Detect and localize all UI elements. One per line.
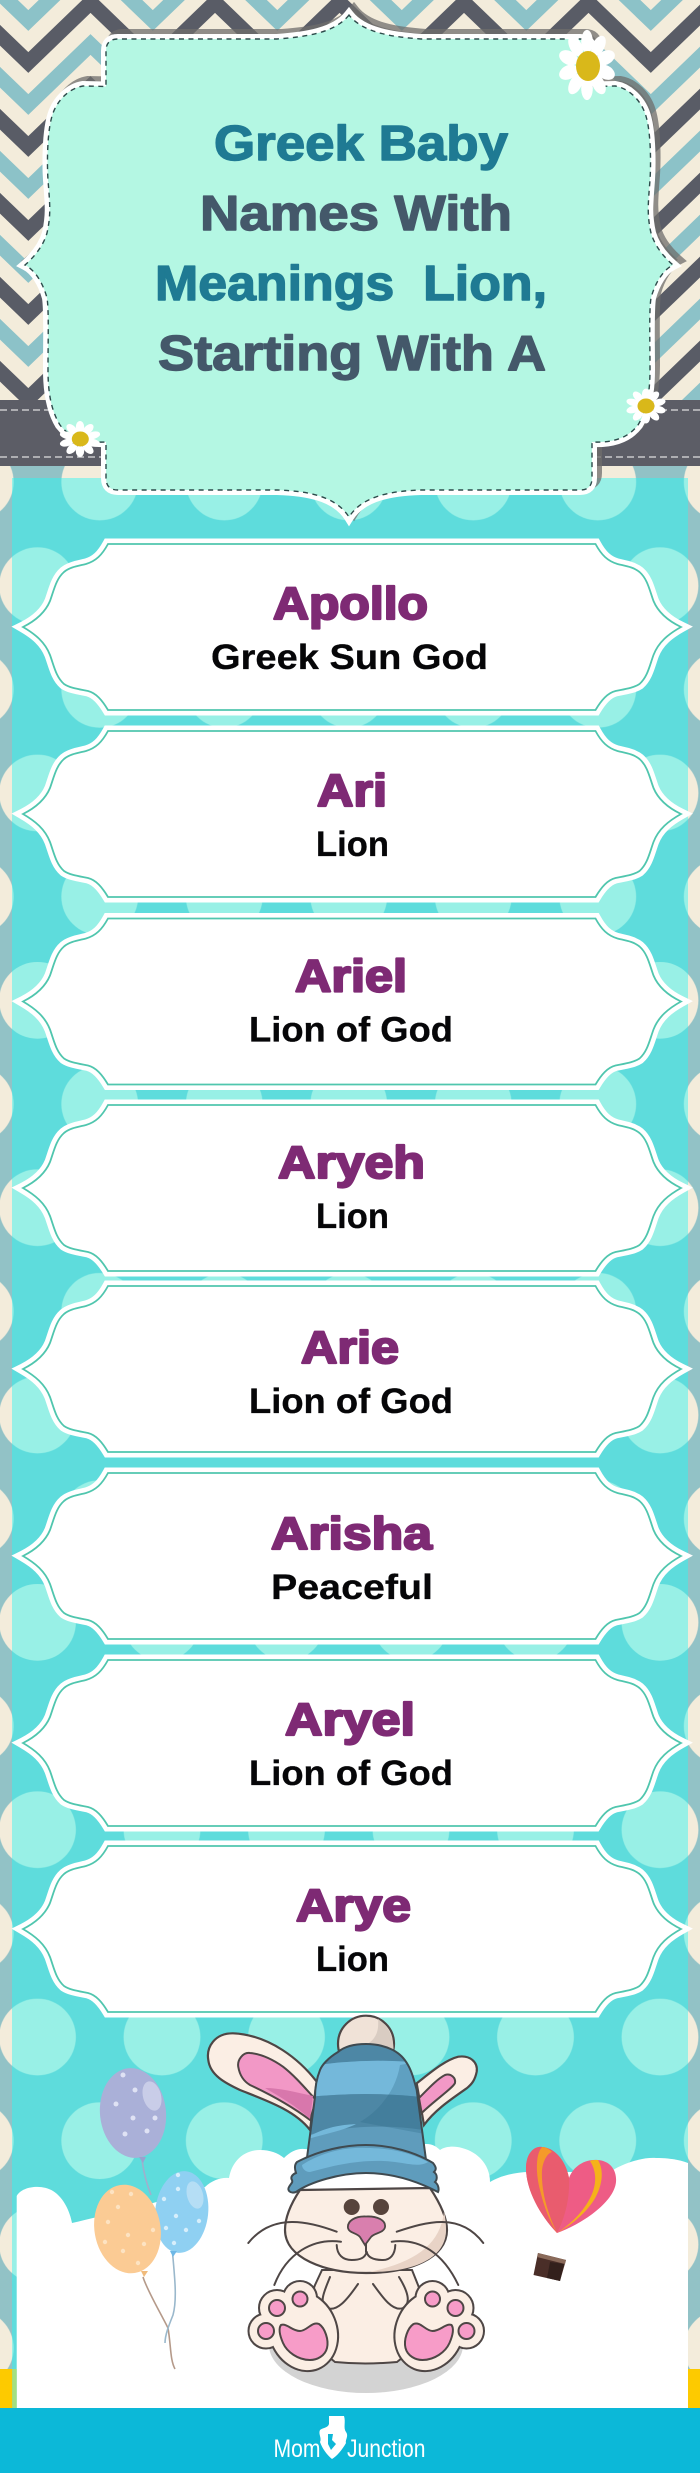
card: Aryel: Aryel <box>285 1694 415 1745</box>
card: Ari: Lion <box>316 825 389 864</box>
balloons <box>87 2065 212 2369</box>
title <box>155 117 547 381</box>
title: Meanings Lion, <box>155 257 547 311</box>
teal polka dot panel <box>12 478 688 2408</box>
card: Aryeh: Lion <box>316 1197 389 1236</box>
card: Arisha <box>23 1473 681 1639</box>
head <box>285 2188 447 2273</box>
left foot <box>250 2282 349 2380</box>
card: Aryel: Lion of God <box>249 1754 453 1793</box>
card: Ariel: Lion of God <box>249 1010 453 1050</box>
title: Greek Baby <box>214 117 508 171</box>
hot air balloon basket <box>534 2253 566 2281</box>
pom pom <box>338 2016 394 2072</box>
hat brim <box>288 2145 439 2193</box>
card: Aryel <box>23 1660 681 1826</box>
icon: daisy bottom left <box>59 421 101 457</box>
card: Arye: Lion <box>316 1940 389 1979</box>
card: Aryeh <box>23 1105 681 1271</box>
eyes <box>344 2199 389 2215</box>
clouds <box>17 2144 688 2408</box>
ground shadow <box>269 2297 463 2393</box>
icon: daisy top right <box>558 30 616 100</box>
card: Ariel: Ariel <box>295 950 407 1002</box>
card: Arisha: Arisha <box>271 1508 433 1559</box>
card: Arisha: Peaceful <box>271 1568 433 1607</box>
hot air balloon heart <box>526 2147 616 2233</box>
card: Arie: Lion of God <box>249 1382 453 1421</box>
footer bar <box>0 2408 700 2473</box>
card: Aryeh: Aryeh <box>278 1137 425 1188</box>
logo: MomJunction: Junction <box>347 2435 426 2463</box>
title: Names With <box>200 187 512 241</box>
card: Arie: Arie <box>301 1322 399 1373</box>
card: Apollo <box>23 544 681 710</box>
polka dot side strips <box>0 466 700 2408</box>
yellow corners <box>0 2369 700 2408</box>
card: Arye <box>23 1846 681 2012</box>
mouth and whiskers <box>248 2222 483 2285</box>
title: Starting With A <box>158 327 546 381</box>
title panel <box>25 10 678 517</box>
bunny illustration <box>208 2016 483 2393</box>
left ear <box>208 2033 317 2130</box>
card: Arye: Arye <box>296 1880 411 1931</box>
card: Ari <box>23 731 681 897</box>
logo: MomJunction <box>274 2416 426 2463</box>
bunny arms <box>323 2277 408 2309</box>
bunny body <box>311 2270 422 2364</box>
hat <box>306 2043 427 2158</box>
card: Apollo: Greek Sun God <box>211 638 488 677</box>
right ear <box>417 2056 477 2125</box>
right foot <box>384 2282 483 2380</box>
card: Ari: Ari <box>317 765 387 816</box>
chevron header background <box>0 0 700 400</box>
card: Apollo: Apollo <box>273 578 428 629</box>
nose <box>348 2216 385 2245</box>
icon: daisy right <box>625 389 667 423</box>
dark stitched band <box>0 400 700 466</box>
card: Arie <box>23 1286 681 1452</box>
logo: MomJunction: Mom <box>274 2435 320 2463</box>
card: Ariel <box>23 918 681 1084</box>
